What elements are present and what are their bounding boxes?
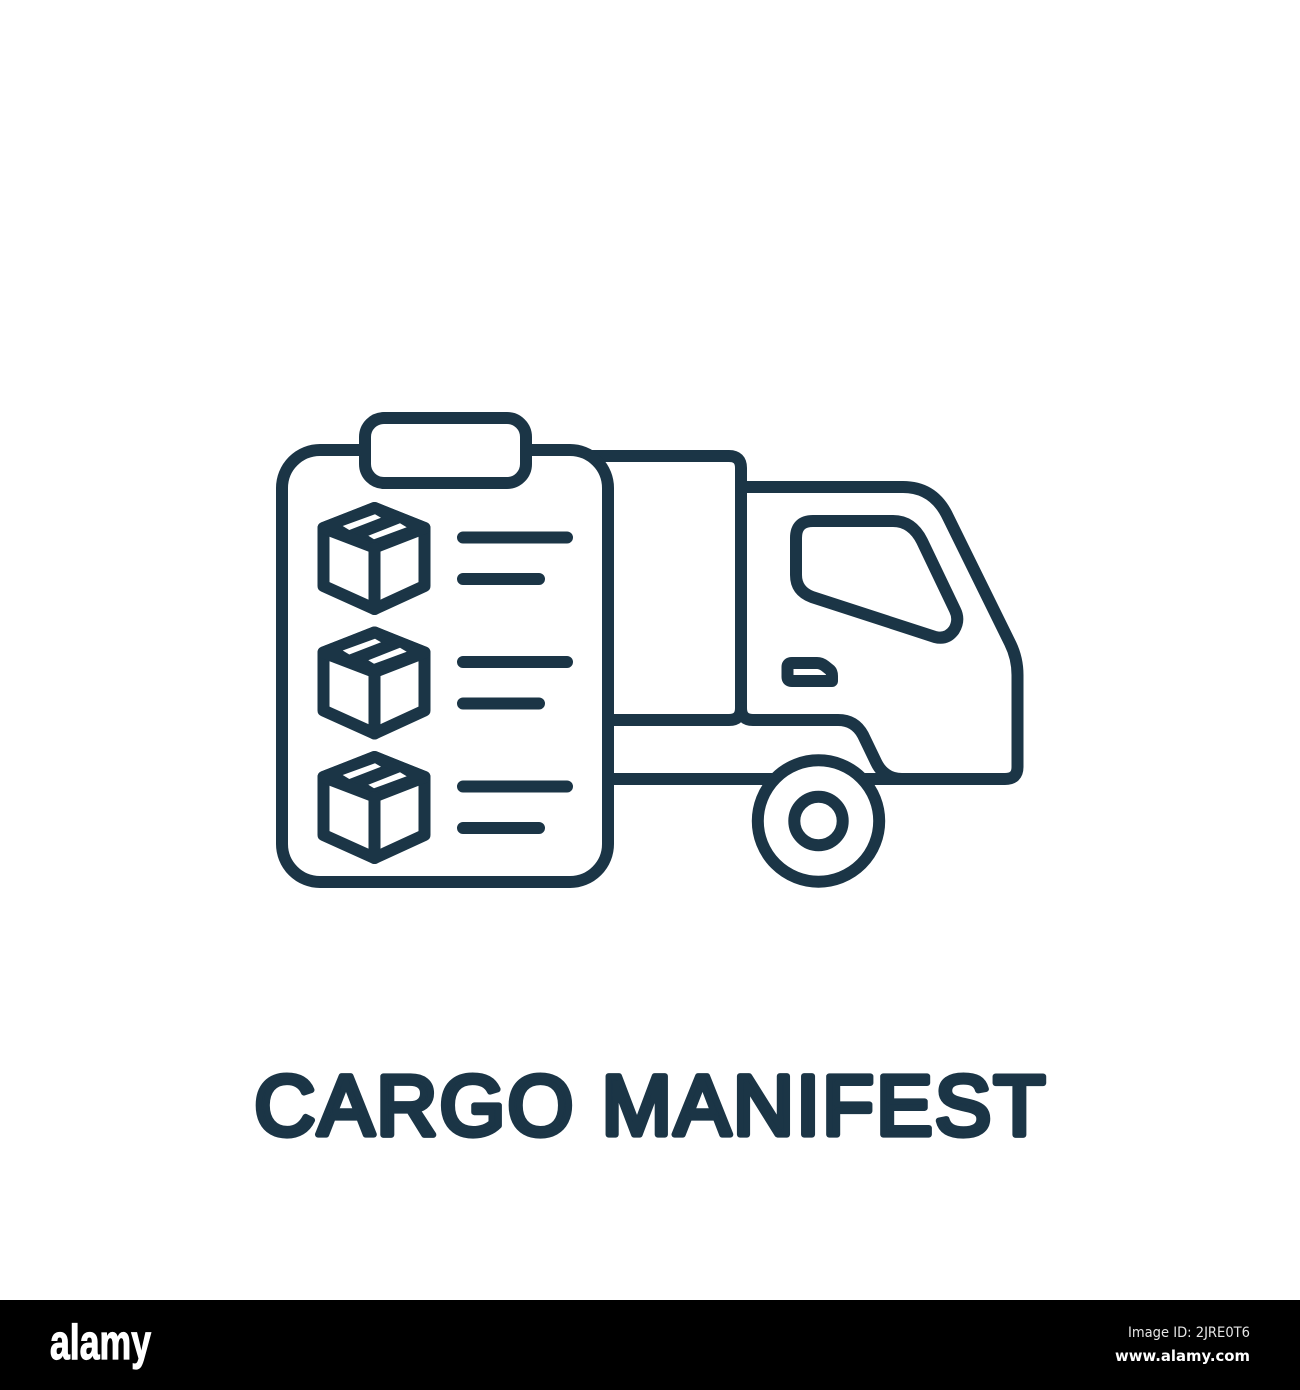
footer bar [0,1300,1300,1390]
truck cab [608,487,1018,779]
clipboard board [282,450,608,882]
website: www.alamy.com [1115,1347,1250,1365]
door mirror [788,663,832,681]
cab window [796,521,957,638]
icon: truck and cargo manifest [282,418,1018,882]
image id: Image ID: 2JRE0T6 [1128,1325,1250,1341]
manifest row 2 [324,632,567,734]
truck cargo box [588,456,741,720]
cargo box 1 [324,508,424,609]
list lines 3 [463,786,567,828]
title: CARGO MANIFEST [254,1058,1045,1152]
clipboard clip [365,418,526,483]
list lines 2 [463,662,567,704]
cargo box 2 [324,632,424,734]
list lines 1 [463,538,567,579]
manifest row 3 [324,757,567,858]
manifest row 1 [324,508,567,609]
front wheel [758,760,879,882]
footer logo: alamy [50,1316,151,1370]
icon: truck [588,456,1018,882]
wheel hub [794,797,843,845]
cargo box 3 [324,757,424,858]
